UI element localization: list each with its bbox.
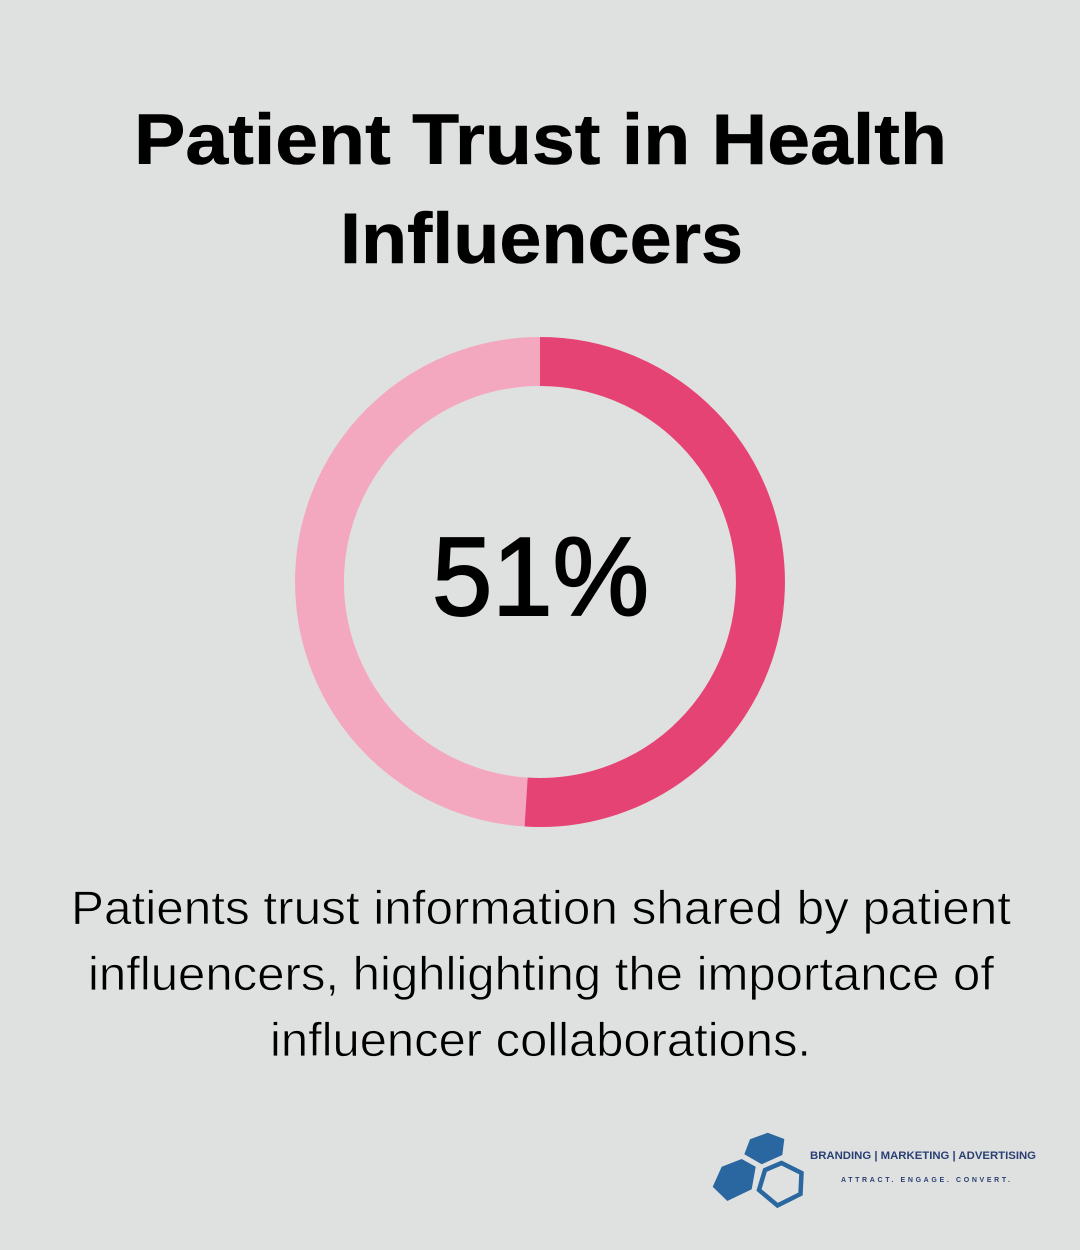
percentage value: 51% [432, 515, 649, 639]
title: Influencers [340, 200, 743, 279]
donut chart: 51% [320, 362, 760, 802]
description text: influencer collaborations. [270, 1013, 811, 1066]
logo tagline [810, 1150, 1036, 1184]
title: Patient Trust in Health [134, 101, 947, 180]
icon: hexagons [713, 1133, 802, 1206]
description text: Patients trust information shared by patient [71, 881, 1011, 934]
title [134, 101, 947, 279]
description text: influencers, highlighting the importance of [88, 947, 995, 1000]
description text [71, 881, 1011, 1066]
logo tagline: BRANDING | MARKETING | ADVERTISING [810, 1150, 1036, 1162]
logo tagline: ATTRACT. ENGAGE. CONVERT. [841, 1177, 1010, 1184]
logo [713, 1133, 1036, 1206]
remaining share ring [320, 362, 760, 802]
highlighted 51% arc [526, 362, 760, 802]
